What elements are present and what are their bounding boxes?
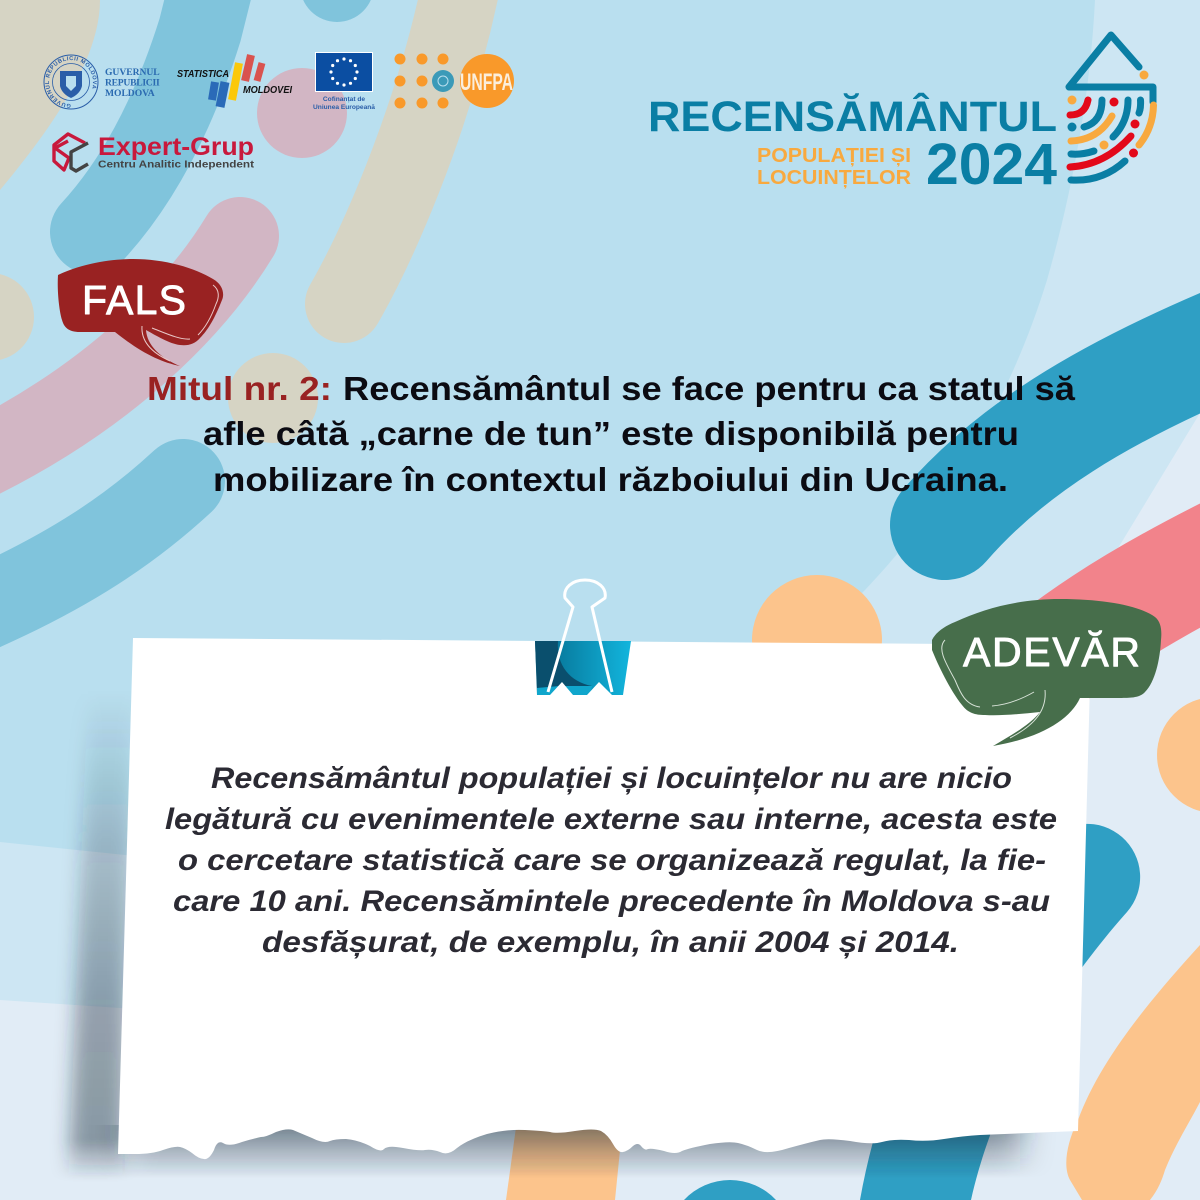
paper shadow (68, 690, 1020, 1190)
logo: Expert-Grup: Centru Analitic Independent (98, 160, 255, 170)
logo: Uniunea Europeana: Uniunea Europeană (313, 104, 375, 111)
logo: Expert-Grup (54, 133, 255, 171)
badge: FALS: FALS (82, 277, 186, 323)
logo: Statistica Moldovei: MOLDOVEI (243, 85, 292, 96)
logo: Uniunea Europeana: Cofinanțat de (323, 96, 365, 103)
logo subtitle (757, 145, 912, 189)
logo: Guvernul Republicii Moldova: REPUBLICII (105, 78, 160, 88)
panel: myth statement: Recensământul se face pentru ca statul să (343, 370, 1076, 407)
answer text: care 10 ani. Recensămintele precedente în Moldova s-au (173, 885, 1050, 918)
answer text: o cercetare statistică care se organizează regulat, la fie- (178, 844, 1046, 877)
panel: myth statement (147, 370, 1076, 498)
logo: UNFPA: UNFPA (460, 69, 513, 96)
logo: Statistica Moldovei (177, 55, 292, 107)
answer text: Recensământul populației și locuințelor nu are nicio (211, 762, 1012, 795)
logo: Guvernul Republicii Moldova: GUVERNUL REPUBLICII MOLDOVA (45, 56, 97, 108)
badge: ADEVAR (932, 599, 1161, 746)
logo: Recensamantul 2024 (648, 35, 1154, 197)
logo: Guvernul Republicii Moldova: GUVERNUL (105, 67, 160, 78)
logo: Guvernul Republicii Moldova (44, 54, 160, 110)
answer text: desfășurat, de exemplu, în anii 2004 și 2014. (262, 926, 959, 959)
logo year: 2024 (926, 132, 1057, 197)
logo: Uniunea Europeana (313, 52, 375, 111)
logo mark: house (1068, 35, 1154, 180)
logo: Expert-Grup: Expert-Grup (98, 133, 254, 161)
icon: binder clip (535, 580, 631, 695)
logo subtitle: LOCUINȚELOR (757, 167, 912, 189)
panel: myth statement: mobilizare în contextul războiului din Ucraina. (213, 461, 1008, 498)
logo: UNFPA (394, 54, 514, 108)
logo: Guvernul Republicii Moldova: MOLDOVA (105, 88, 155, 99)
answer text (165, 762, 1057, 959)
panel: paper note (118, 638, 1091, 1159)
badge: ADEVAR: ADEVĂR (963, 629, 1140, 675)
panel: myth statement: Mitul nr. 2: (147, 370, 332, 407)
logo: Statistica Moldovei: STATISTICA (177, 69, 229, 80)
badge: FALS (58, 259, 223, 366)
logo title: RECENSĂMÂNTUL (648, 92, 1057, 141)
answer text: legătură cu evenimentele externe sau interne, acesta este (165, 803, 1057, 836)
panel: myth statement: afle câtă „carne de tun” este disponibilă pentru (203, 415, 1019, 452)
logo subtitle: POPULAȚIEI ȘI (757, 145, 911, 167)
